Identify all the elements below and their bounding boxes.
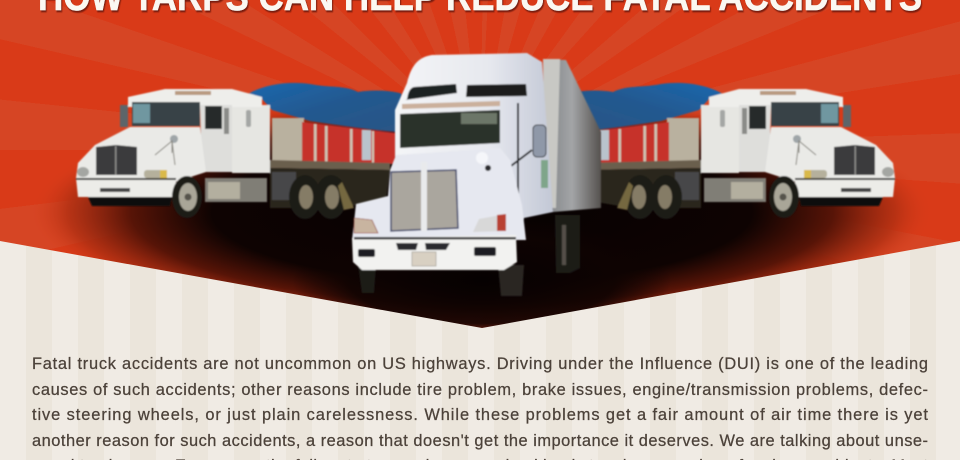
text line 1: Fatal truck accidents are not uncommon on US highways. Driving under the Influence (DUI) is one of the leading — [32, 355, 928, 373]
headlights — [354, 218, 378, 233]
text line 2: causes of such accidents; other reasons include tire problem, brake issues, engine/transmission problems, defec- — [32, 381, 928, 399]
right tarped flatbed truck — [569, 83, 895, 219]
grille — [391, 170, 458, 231]
background: red sunburst rays — [0, 0, 960, 340]
text line 3: tive steering wheels, or just plain carelessness. While these problems get a fair amount of air time there is yet — [32, 406, 928, 424]
dark shadow under center truck — [292, 218, 672, 342]
cab — [395, 53, 553, 240]
text line 4: another reason for such accidents, a reason that doesn't get the importance it deserves. We are talking about unse- — [32, 432, 928, 450]
dark ground shadow behind trucks — [32, 94, 932, 330]
side mirror — [533, 125, 546, 157]
front tires — [358, 265, 376, 293]
left tarped flatbed truck — [76, 83, 402, 219]
bumper — [352, 235, 517, 270]
rear wheels — [555, 215, 580, 273]
intro paragraph — [32, 355, 928, 460]
center white semi truck — [352, 53, 601, 296]
hood and fenders — [352, 148, 526, 240]
cream striped panel with V-shaped top — [0, 241, 960, 460]
trailer — [543, 59, 601, 212]
